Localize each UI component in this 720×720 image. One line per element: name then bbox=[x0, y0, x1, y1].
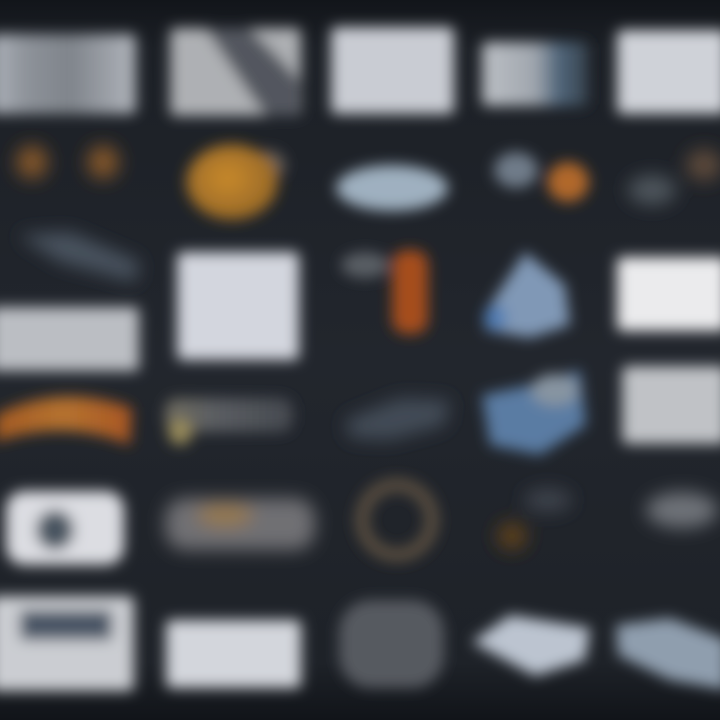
tile: light grey panel bbox=[622, 366, 720, 444]
row 6 tiles bbox=[0, 596, 720, 691]
tile: bright right panel bbox=[617, 257, 720, 331]
row 1 tiles bbox=[0, 27, 720, 116]
icon: dim streak bbox=[18, 232, 140, 282]
row 5 tiles bbox=[6, 485, 718, 565]
row 4 tiles bbox=[0, 366, 720, 455]
tile: dark grey disc bbox=[339, 600, 444, 688]
tile: wide grey panel bbox=[0, 307, 139, 371]
tile: panel with dark inset bbox=[0, 596, 134, 691]
icon: orange figure bbox=[341, 250, 428, 334]
tile: light and blue panel bbox=[482, 42, 588, 106]
icon: dim orange and grey bbox=[497, 488, 572, 550]
icon: dim streak bbox=[345, 398, 450, 440]
icon: orange arc bbox=[0, 397, 132, 445]
icon: blue-grey panel bbox=[616, 618, 720, 690]
icon: blue cluster bbox=[482, 370, 586, 455]
row 2 tiles bbox=[16, 144, 720, 220]
tile: grey panel bbox=[0, 34, 136, 114]
tile: large white square bbox=[177, 252, 299, 360]
tile: lower light panel bbox=[166, 620, 301, 688]
icon: brown ring bbox=[362, 485, 432, 555]
row 3 tiles bbox=[0, 232, 720, 371]
tile: right light panel bbox=[617, 30, 720, 114]
icon: blue shape bbox=[484, 252, 570, 338]
icon: blue and orange blobs bbox=[494, 152, 589, 202]
tile: plain light panel bbox=[331, 27, 454, 114]
icon: light diamond bbox=[472, 615, 590, 676]
icon: flat blue ellipse bbox=[336, 165, 448, 211]
icon: dim blobs bbox=[628, 149, 720, 205]
icon: grey bar with orange bbox=[165, 498, 315, 550]
icon: twin orange dots bbox=[16, 145, 119, 179]
tile: rounded white badge bbox=[6, 491, 124, 565]
tile: diagonal band panel bbox=[170, 28, 301, 116]
icon: grey and yellow bar bbox=[165, 398, 293, 445]
icon: grey cluster bbox=[646, 492, 718, 528]
icon: orange ball bbox=[186, 144, 286, 220]
